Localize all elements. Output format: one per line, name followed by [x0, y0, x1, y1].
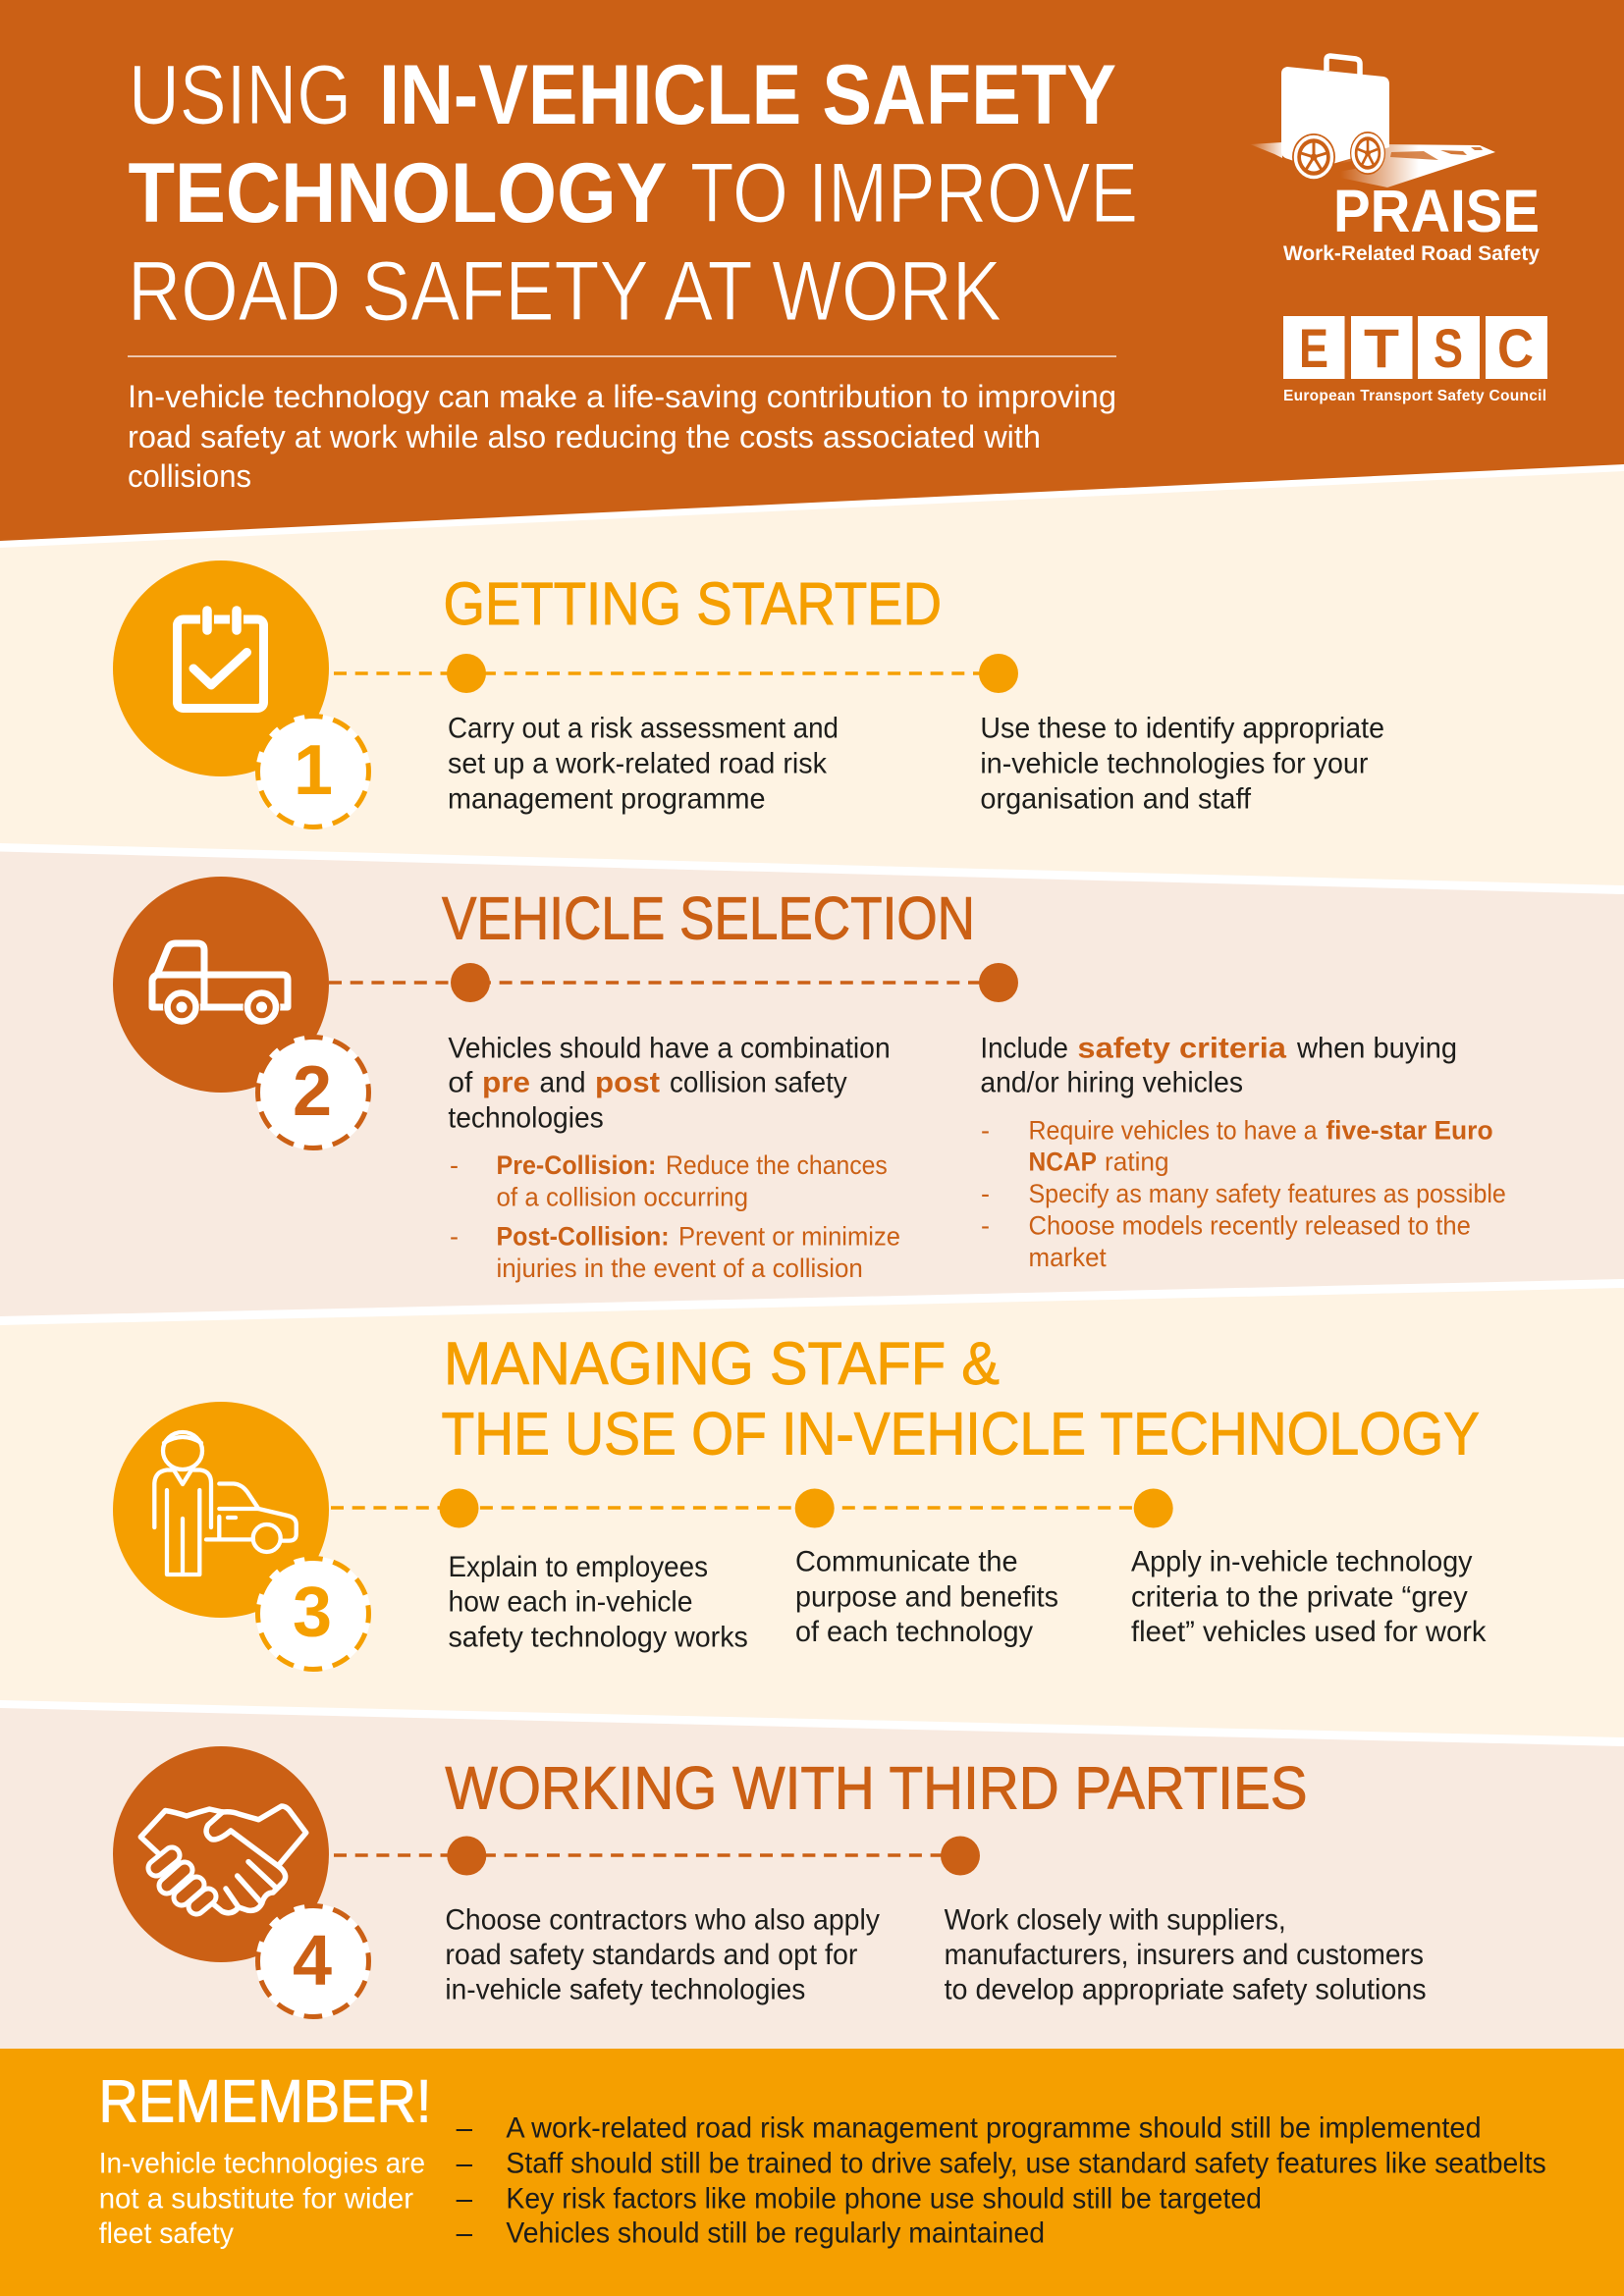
number badge 1: 1 — [294, 731, 333, 810]
text: not a substitute: fleet safety — [99, 2217, 234, 2250]
logo: PRAISE: PRAISE — [1333, 178, 1540, 244]
list: safety criteria: Require vehicles to have a — [1029, 1116, 1318, 1146]
list: remember items: Vehicles should still be regularly maintained — [506, 2216, 1045, 2249]
number badge 4: 4 — [293, 1922, 332, 2001]
text: work closely: manufacturers, insurers and customers — [945, 1939, 1424, 1971]
text: explain to employees: safety technology works — [448, 1621, 748, 1653]
heading: remember: REMEMBER! — [98, 2068, 432, 2135]
panel: managing staff — [0, 1288, 1624, 1737]
text: risk assessment: Carry out a risk assessment and — [448, 713, 839, 745]
panel: header — [0, 0, 1624, 541]
list: remember items: Key risk factors like mobile phone use should still be targeted — [506, 2182, 1262, 2215]
icon: calendar with check — [113, 561, 329, 776]
text: identify technologies — [980, 713, 1384, 815]
logo: ETSC: C — [1497, 317, 1534, 379]
list: remember items: – — [457, 2216, 473, 2249]
number badge 3: 3 — [293, 1573, 332, 1651]
logo: ETSC: European Transport Safety Council — [1283, 388, 1546, 404]
text: safety criteria: Include — [980, 1032, 1068, 1064]
text: work closely — [945, 1904, 1427, 2006]
text: identify technologies: Use these to identify appropriate — [980, 713, 1384, 745]
text: identify technologies: organisation and staff — [980, 782, 1252, 815]
list: safety criteria: - — [981, 1116, 990, 1146]
logo: PRAISE — [1250, 56, 1540, 265]
text: explain to employees — [448, 1551, 748, 1653]
text: risk assessment: set up a work-related road risk — [448, 748, 828, 779]
logo: ETSC: E — [1299, 317, 1328, 379]
text: choose contractors: in-vehicle safety technologies — [445, 1974, 805, 2006]
logo: ETSC: S — [1434, 317, 1463, 379]
text: safety criteria: when buying — [1296, 1032, 1457, 1064]
list: pre and post collision: - — [450, 1150, 459, 1180]
logo: ETSC — [1283, 316, 1547, 404]
text: work closely: Work closely with suppliers, — [945, 1904, 1286, 1937]
heading: managing staff: MANAGING STAFF & — [444, 1330, 1000, 1397]
list: safety criteria: rating — [1105, 1148, 1169, 1177]
heading: working with third parties: WORKING WITH THIRD PARTIES — [445, 1755, 1308, 1822]
text: safety criteria: and/or hiring vehicles — [980, 1067, 1243, 1099]
panel: remember — [0, 2049, 1624, 2296]
intro text: In-vehicle technology can make a life-saving contribution to improving — [128, 379, 1116, 414]
icon: pickup truck — [113, 877, 329, 1093]
list: remember items: Staff should still be trained to drive safely, use standard safety features like seatbelts — [506, 2147, 1546, 2179]
text: grey fleet: criteria to the private “grey — [1131, 1581, 1468, 1614]
text: combination of technologies: technologies — [448, 1101, 604, 1134]
text: not a substitute: not a substitute for wider — [99, 2182, 413, 2215]
title: TO IMPROVE — [690, 146, 1138, 240]
list: safety criteria — [981, 1116, 1506, 1272]
text: safety criteria: safety criteria — [1077, 1032, 1286, 1064]
title: TECHNOLOGY — [128, 146, 668, 240]
text: communicate purpose: of each technology — [795, 1616, 1033, 1648]
text: not a substitute: In-vehicle technologies are — [99, 2147, 425, 2179]
text: combination of technologies: of — [448, 1067, 473, 1099]
list: safety criteria: Specify as many safety features as possible — [1029, 1179, 1506, 1208]
text: choose contractors — [445, 1904, 880, 2006]
text: grey fleet — [1131, 1546, 1487, 1648]
number badge 4 — [255, 1904, 371, 2018]
text: choose contractors: Choose contractors who also apply — [445, 1904, 880, 1937]
list: safety criteria: NCAP — [1029, 1148, 1097, 1177]
list: remember items: – — [457, 2182, 473, 2215]
panel: working with third parties — [0, 1708, 1624, 2049]
heading: vehicle selection: VEHICLE SELECTION — [442, 885, 975, 952]
timeline — [334, 654, 1018, 693]
list: safety criteria: market — [1029, 1243, 1107, 1272]
list: remember items: – — [457, 2111, 473, 2144]
list: remember items — [457, 2111, 1546, 2249]
text: communicate purpose: purpose and benefits — [795, 1581, 1058, 1614]
title: IN-VEHICLE SAFETY — [379, 48, 1116, 142]
list: remember items: – — [457, 2147, 473, 2179]
heading: getting started: GETTING STARTED — [444, 570, 942, 637]
timeline — [329, 963, 1018, 1002]
text: grey fleet: fleet” vehicles used for work — [1131, 1616, 1487, 1648]
timeline — [331, 1488, 1173, 1527]
text: choose contractors: road safety standards and opt for — [445, 1939, 857, 1971]
text: combination of technologies: and — [540, 1067, 585, 1099]
list: pre and post collision: injuries in the event of a collision — [497, 1254, 863, 1283]
panel: getting started — [0, 471, 1624, 885]
list: safety criteria: - — [981, 1179, 990, 1208]
list: safety criteria: - — [981, 1210, 990, 1240]
title — [128, 48, 1138, 339]
text: communicate purpose: Communicate the — [795, 1546, 1018, 1578]
number badge 1 — [255, 715, 371, 828]
list: remember items: A work-related road risk management programme should still be implemented — [506, 2111, 1482, 2144]
text: safety criteria — [980, 1032, 1457, 1099]
list: pre and post collision: of a collision occurring — [497, 1182, 748, 1211]
panel: vehicle selection — [0, 852, 1624, 1316]
text: explain to employees: how each in-vehicle — [448, 1586, 693, 1619]
text: risk assessment: management programme — [448, 782, 766, 815]
list: pre and post collision: - — [450, 1221, 459, 1251]
intro text: road safety at work while also reducing the costs associated with — [128, 419, 1041, 454]
text: not a substitute — [99, 2147, 425, 2250]
text: combination of technologies: Vehicles should have a combination — [448, 1032, 891, 1064]
text: combination of technologies: pre — [482, 1067, 530, 1099]
text: work closely: to develop appropriate safety solutions — [945, 1974, 1427, 2006]
intro text — [128, 379, 1116, 494]
text: risk assessment — [448, 713, 839, 815]
logo: PRAISE: Work-Related Road Safety — [1283, 241, 1540, 265]
text: identify technologies: in-vehicle technologies for your — [980, 748, 1368, 779]
list: pre and post collision: Pre-Collision: — [497, 1150, 656, 1180]
text: combination of technologies: collision safety — [670, 1067, 847, 1099]
heading: managing staff: THE USE OF IN-VEHICLE TECHNOLOGY — [442, 1401, 1480, 1468]
icon: person and car — [113, 1402, 329, 1618]
text: grey fleet: Apply in-vehicle technology — [1131, 1546, 1473, 1578]
logo: ETSC: T — [1364, 317, 1399, 379]
number badge 3 — [255, 1557, 371, 1671]
list: safety criteria: Choose models recently released to the — [1029, 1210, 1471, 1240]
list: pre and post collision: Reduce the chances — [666, 1150, 888, 1180]
list: pre and post collision — [450, 1150, 900, 1283]
text: communicate purpose — [795, 1546, 1058, 1648]
timeline — [334, 1836, 980, 1875]
text: combination of technologies: post — [595, 1067, 660, 1099]
icon: handshake — [113, 1746, 329, 1962]
text: combination of technologies — [448, 1032, 891, 1134]
text: explain to employees: Explain to employees — [448, 1551, 708, 1583]
heading: managing staff — [442, 1330, 1480, 1468]
list: pre and post collision: Prevent or minimize — [678, 1221, 900, 1251]
title: ROAD SAFETY AT WORK — [128, 244, 1001, 339]
title: USING — [129, 48, 352, 142]
number badge 2: 2 — [293, 1052, 332, 1131]
intro text: collisions — [128, 458, 251, 494]
list: pre and post collision: Post-Collision: — [497, 1221, 670, 1251]
number badge 2 — [255, 1035, 371, 1150]
list: safety criteria: five-star Euro — [1326, 1116, 1493, 1146]
